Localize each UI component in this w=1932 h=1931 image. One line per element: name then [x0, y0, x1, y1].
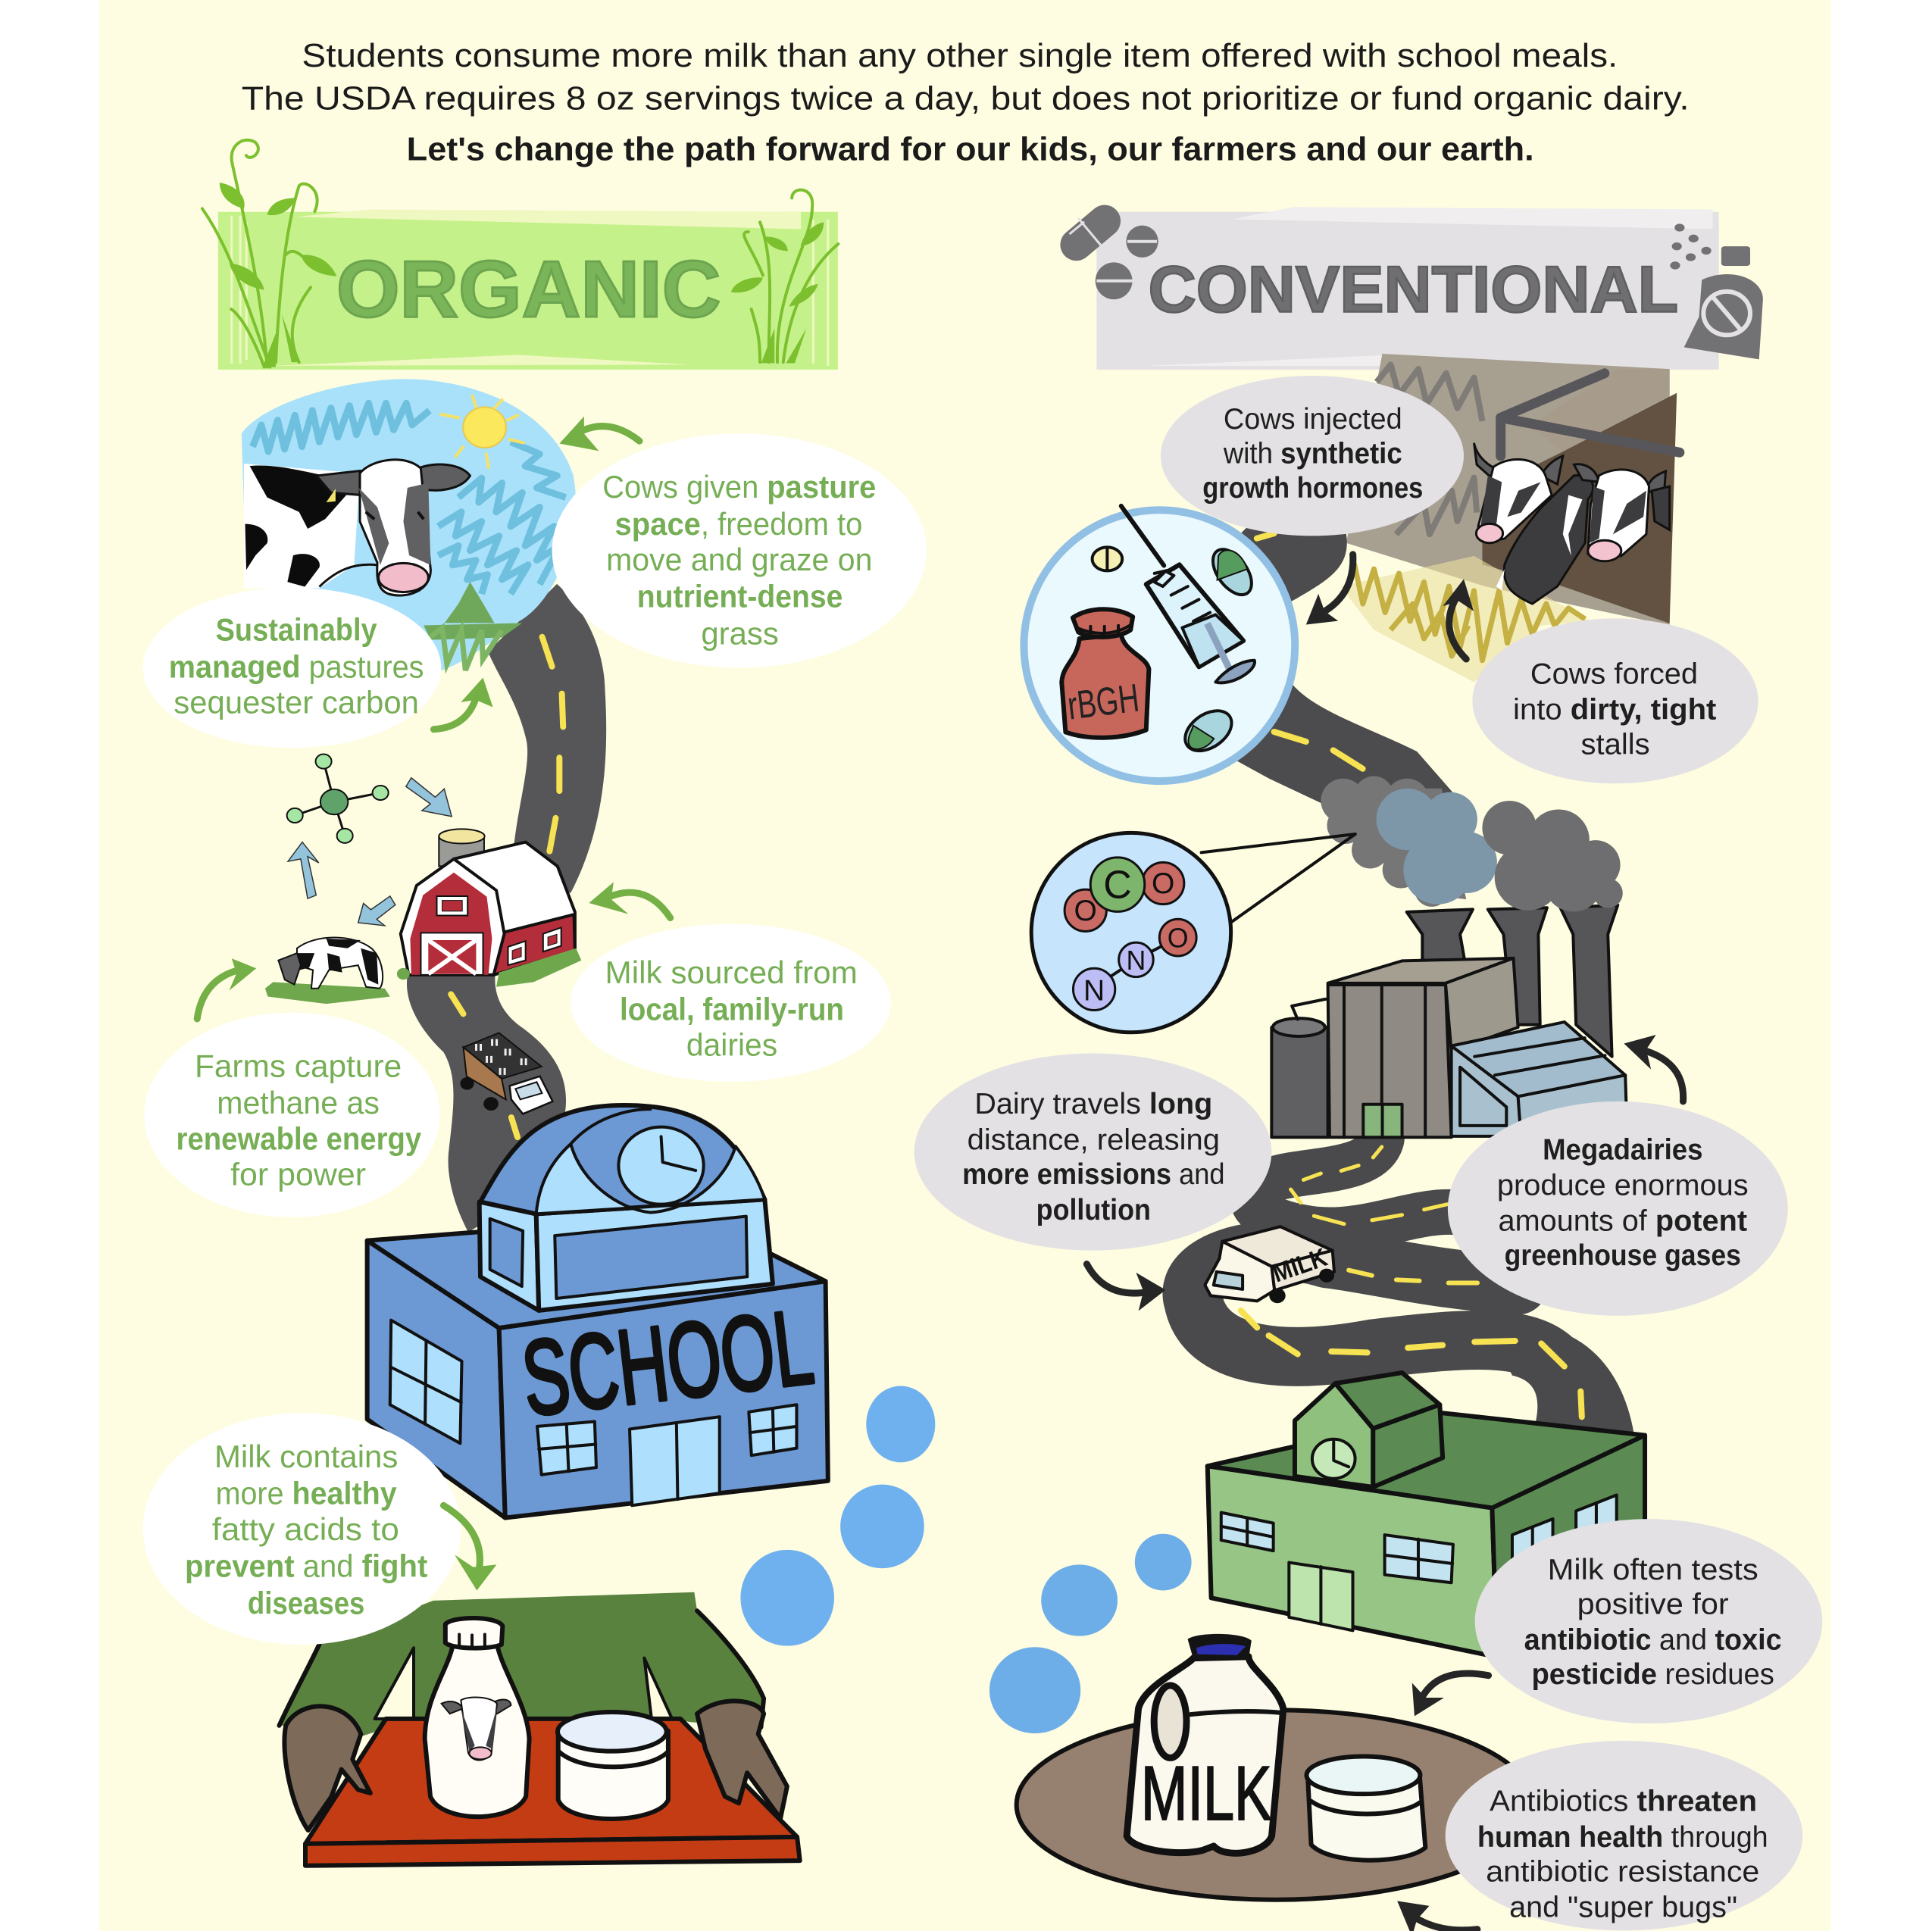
left wall window — [390, 1320, 461, 1443]
icon: capsule and pills — [1054, 198, 1158, 299]
road: organic lower — [407, 973, 566, 1232]
callout: long distance: pollution — [1036, 1194, 1151, 1226]
cupola — [480, 1201, 539, 1311]
callout: tight stalls: into dirty, tight — [1513, 694, 1716, 726]
callout: growth hormones: growth hormones — [1202, 472, 1423, 505]
callout: antibiotic residues: antibiotic and toxic — [1524, 1624, 1782, 1657]
callout: healthy fatty acids: fatty acids to — [212, 1511, 399, 1547]
cow head — [360, 460, 430, 595]
organic banner — [202, 140, 838, 370]
emissions molecule circle: N — [1083, 975, 1105, 1008]
callout: growth hormones: Cows injected — [1224, 403, 1402, 436]
arrow: megadairies callout to factory — [1624, 1035, 1683, 1101]
gaps at the arms — [375, 1648, 414, 1719]
header text: Students consume more milk than any other single item offered with school meals. — [302, 37, 1618, 74]
conventional title: CONVENTIONAL — [1149, 253, 1678, 326]
injection circle: hormones — [1024, 506, 1295, 781]
callout: megadairies: amounts of potent — [1499, 1205, 1747, 1238]
arrow: hormones callout to syringe — [1306, 555, 1353, 625]
arrow: long distance callout to truck — [1086, 1264, 1165, 1311]
callout: pasture space: grass — [701, 616, 779, 651]
callout: super bugs — [1446, 1741, 1802, 1930]
capsule lower — [1176, 704, 1241, 758]
road lane markings: conventional upper — [1257, 533, 1363, 769]
road widening toward school — [1489, 1325, 1634, 1434]
callout: megadairies: Megadairies — [1543, 1133, 1703, 1166]
clock — [618, 1127, 704, 1205]
callout: long distance — [914, 1053, 1271, 1251]
capsule upper — [1205, 545, 1259, 599]
callout: local family dairies — [571, 924, 891, 1082]
callout: methane energy: renewable energy — [177, 1120, 421, 1156]
callout: antibiotic residues: pesticide residues — [1531, 1658, 1774, 1691]
cow body — [244, 464, 360, 588]
emissions molecule circle: O — [1074, 895, 1097, 927]
lower road — [1192, 1251, 1585, 1429]
lane markings — [1291, 1147, 1447, 1224]
emissions molecule circle: O — [1152, 867, 1174, 900]
milk bubbles: organic — [740, 1386, 935, 1646]
road: organic upper — [488, 584, 606, 893]
tray — [305, 1719, 797, 1844]
callout: megadairies — [1448, 1101, 1788, 1316]
callout: local family dairies: dairies — [686, 1027, 777, 1063]
jug handle — [1154, 1686, 1186, 1758]
left cow head — [1474, 443, 1563, 484]
road lane markings: organic — [451, 637, 563, 1137]
illustration: green school — [1208, 1373, 1645, 1657]
yogurt jar — [558, 1730, 668, 1819]
icon: blue cycle arrows — [288, 778, 452, 926]
illustration: megadairy factory — [1271, 958, 1627, 1137]
callout: growth hormones: with synthetic — [1223, 437, 1402, 470]
callout: carbon sequester: managed pastures — [169, 648, 424, 684]
annex — [1452, 1046, 1521, 1136]
jug label: MILK — [1141, 1751, 1271, 1836]
header text — [242, 37, 1690, 167]
emissions molecule circle: C — [1103, 864, 1132, 908]
tank — [1271, 1027, 1328, 1137]
arrow: fatty acids callout to tray — [443, 1505, 496, 1591]
illustration: plate with gallon of milk and cup — [1017, 1634, 1534, 1900]
front windows — [537, 1422, 596, 1475]
cow on bottle — [442, 1700, 511, 1714]
cows in stalls — [1474, 443, 1670, 604]
callout: methane energy — [144, 1013, 440, 1217]
callout: pasture space — [552, 433, 927, 667]
arrow: pasture callout to cow — [559, 417, 639, 451]
conventional banner — [1054, 198, 1763, 370]
icon: right grass sprouts — [731, 190, 838, 363]
smoke clouds — [1321, 776, 1623, 911]
icon: molecule — [287, 755, 389, 843]
illustration: student with organic lunch tray — [280, 1592, 800, 1866]
sun — [463, 407, 506, 448]
callout: long distance: Dairy travels long — [974, 1088, 1212, 1120]
callout: tight stalls — [1472, 618, 1758, 783]
callout: healthy fatty acids: Milk contains — [214, 1439, 398, 1474]
conventional winding roads — [1192, 1139, 1634, 1434]
icon: left grass sprouts — [202, 140, 336, 367]
dome — [480, 1105, 764, 1214]
callout: methane energy: Farms capture — [195, 1048, 402, 1083]
callout: super bugs: human health through — [1477, 1821, 1768, 1854]
callout: tight stalls: Cows forced — [1530, 658, 1698, 691]
conventional stalls backdrop — [1340, 354, 1680, 682]
callout: long distance: more emissions and — [962, 1158, 1225, 1191]
icon: organic delivery truck — [460, 1033, 552, 1114]
arrow: dairies callout to barn — [589, 882, 671, 918]
callout: carbon sequester: sequester carbon — [174, 685, 419, 720]
upper road — [1252, 1139, 1466, 1230]
illustration: pasture cow in blue sky — [242, 379, 576, 671]
callout: pasture space: move and graze on — [606, 542, 872, 577]
callout: carbon sequester — [143, 588, 441, 748]
callout: healthy fatty acids: prevent and fight — [185, 1548, 428, 1584]
callout: super bugs: antibiotic resistance — [1486, 1855, 1759, 1888]
callout: pasture space: space, freedom to — [615, 506, 862, 542]
icon: pesticide bottle — [1670, 223, 1763, 359]
shirt — [280, 1592, 764, 1736]
callout: methane energy: methane as — [217, 1085, 380, 1120]
header text: The USDA requires 8 oz servings twice a day, but does not prioritize or fund organic dairy. — [242, 80, 1690, 117]
pill yellow — [1093, 547, 1122, 570]
jug cap — [1188, 1634, 1252, 1660]
callout: megadairies: produce enormous — [1497, 1169, 1749, 1201]
callout: methane energy: for power — [230, 1156, 366, 1192]
stall rail — [1501, 373, 1680, 456]
icon: red barn — [397, 842, 581, 987]
road: conventional upper — [1183, 523, 1460, 819]
syringe — [1121, 506, 1164, 566]
callout: megadairies: greenhouse gases — [1505, 1239, 1741, 1272]
callout: local family dairies: Milk sourced from — [605, 955, 858, 990]
truck label: MILK — [1269, 1243, 1331, 1289]
carbon cycle diagram with barn — [265, 755, 581, 1004]
emissions molecule circle — [1031, 833, 1355, 1033]
rBGH bottle — [1061, 634, 1149, 738]
icon: milk tanker truck — [1205, 1226, 1334, 1303]
main building — [1328, 958, 1513, 983]
callout: carbon sequester: Sustainably — [216, 612, 377, 648]
callout: healthy fatty acids — [143, 1413, 461, 1645]
arrow: carbon callout to pasture — [433, 677, 493, 730]
organic title: ORGANIC — [336, 245, 721, 334]
school label: SCHOOL — [516, 1286, 819, 1438]
callout: healthy fatty acids: diseases — [248, 1585, 364, 1620]
emissions molecule circle: N — [1127, 945, 1146, 976]
emissions molecule circle: O — [1168, 923, 1189, 954]
school door — [630, 1417, 720, 1505]
callout: antibiotic residues: positive for — [1577, 1588, 1729, 1620]
icon: silo — [439, 829, 485, 866]
green cupola — [1295, 1383, 1373, 1487]
callout: healthy fatty acids: more healthy — [216, 1476, 397, 1511]
rBGH label: rBGH — [1065, 676, 1142, 729]
grass tuft — [445, 582, 495, 623]
arrow: residues callout to plate — [1412, 1673, 1489, 1716]
middle cow — [1504, 475, 1593, 604]
callout: pasture space: Cows given pasture — [602, 469, 876, 505]
cup — [1308, 1775, 1425, 1861]
gallon jug — [1127, 1657, 1283, 1853]
callout: super bugs: and "super bugs" — [1509, 1891, 1737, 1923]
arrow: methane callout to cow — [197, 958, 256, 1019]
right cow head — [1574, 464, 1666, 495]
callout: local family dairies: local, family-run — [620, 992, 844, 1027]
callout: tight stalls: stalls — [1581, 728, 1650, 761]
milk bubbles: conventional — [989, 1534, 1192, 1733]
green school windows — [1221, 1513, 1274, 1551]
arrow: super bugs callout to plate — [1397, 1901, 1477, 1931]
callout: long distance: distance, releasing — [968, 1123, 1220, 1156]
hands — [284, 1706, 370, 1830]
callout: super bugs: Antibiotics threaten — [1490, 1786, 1757, 1818]
callout: pasture space: nutrient-dense — [637, 579, 843, 614]
arrow: stalls callout to cows — [1443, 579, 1474, 659]
callout: antibiotic residues: Milk often tests — [1548, 1554, 1758, 1586]
icon: grazing cow — [265, 937, 390, 1004]
milk bottle — [425, 1645, 530, 1817]
callout: antibiotic residues — [1475, 1519, 1822, 1723]
illustration: blue school — [367, 1105, 828, 1518]
header text: Let's change the path forward for our kids, our farmers and our earth. — [407, 130, 1534, 167]
callout: growth hormones — [1161, 376, 1464, 536]
illustration: factory smoke stacks — [1407, 905, 1618, 1057]
